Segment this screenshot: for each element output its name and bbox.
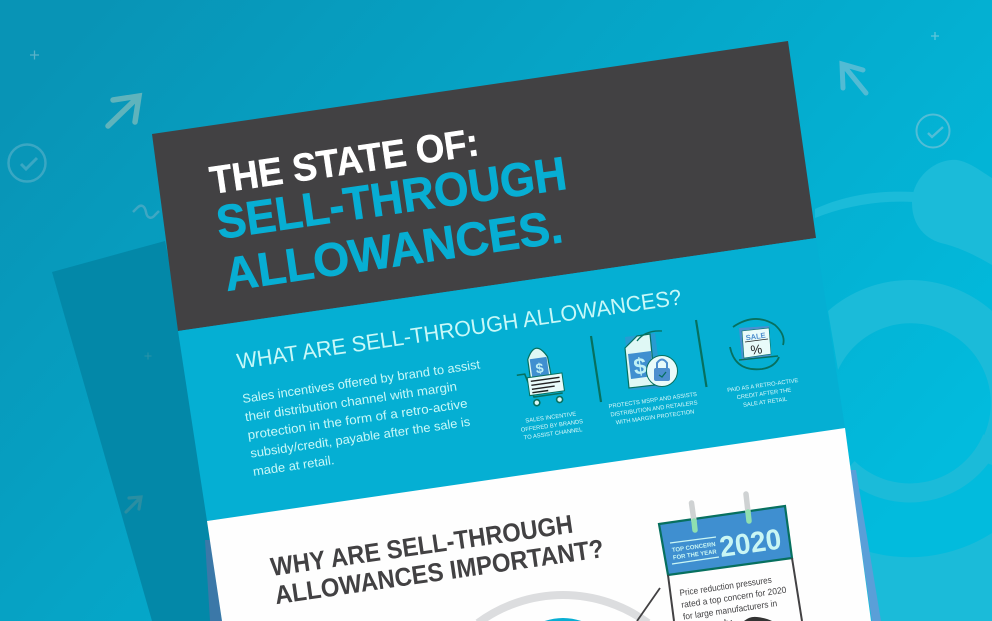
caption: sales incentive: SALES INCENTIVE bbox=[525, 411, 577, 425]
icon: arrow on back sheet bbox=[126, 497, 141, 512]
calendar: top concern 2020 bbox=[659, 494, 802, 621]
calendar blob bbox=[744, 617, 772, 621]
panel: white lower section bbox=[207, 428, 871, 621]
caption: paid as retro-active: CREDIT AFTER THE bbox=[736, 388, 792, 401]
calendar rings bbox=[692, 494, 748, 521]
icon: price tag with lock: $ bbox=[632, 352, 648, 380]
icon: sale sign with circular arrows bbox=[730, 319, 784, 369]
chart ring partial bbox=[478, 588, 660, 621]
definition text: Sales incentives offered by brand to assist bbox=[241, 357, 481, 406]
decorative ring shapes bbox=[815, 160, 992, 621]
caption: protects msrp: PROTECTS MSRP AND ASSISTS bbox=[608, 392, 698, 410]
page edge sliver right bbox=[850, 470, 881, 621]
title line 3: ALLOWANCES. bbox=[221, 199, 566, 301]
calendar text: Price reduction pressures bbox=[679, 575, 773, 598]
icon: plus on back sheet bbox=[144, 352, 152, 360]
calendar year: 2020 bbox=[718, 524, 783, 564]
calendar label: FOR THE YEAR bbox=[673, 549, 718, 561]
icon: plus top right bbox=[931, 32, 939, 40]
definition text: protection in the form of a retro-active bbox=[247, 396, 468, 442]
calendar label rules bbox=[670, 537, 719, 564]
heading: why are sell-through allowances important: ALLOWANCES IMPORTANT? bbox=[273, 533, 606, 610]
icon: price tag with lock bbox=[625, 331, 678, 390]
caption: paid as retro-active bbox=[727, 378, 801, 411]
icon: arrow top right bbox=[842, 64, 866, 93]
title line 1: THE STATE OF: bbox=[207, 121, 481, 203]
definition text bbox=[241, 357, 492, 479]
icon: arrow top left bbox=[108, 96, 139, 126]
heading: what are sell-through allowances: WHAT ARE SELL-THROUGH ALLOWANCES? bbox=[235, 284, 683, 374]
definition text: their distribution channel with margin bbox=[244, 379, 458, 424]
calendar text: rated a top concern for 2020 bbox=[681, 585, 787, 610]
icon: sale sign with circular arrows: % bbox=[750, 341, 764, 358]
icon: shopping cart with tag: $ bbox=[535, 360, 545, 376]
icon: check circle left bbox=[8, 144, 46, 182]
calendar label: TOP CONCERN bbox=[672, 542, 716, 554]
divider one bbox=[591, 336, 601, 402]
caption: paid as retro-active: SALE AT RETAIL bbox=[743, 397, 788, 409]
caption: protects msrp: WITH MARGIN PROTECTION bbox=[616, 409, 695, 426]
calendar edges bbox=[668, 558, 802, 621]
icon: check circle right bbox=[916, 114, 950, 148]
icon: plus top left bbox=[30, 50, 39, 60]
calendar text: for large manufacturers in bbox=[682, 598, 778, 621]
icon: squiggle bbox=[133, 206, 159, 218]
icon: shopping cart with tag bbox=[513, 345, 566, 408]
definition text: made at retail. bbox=[252, 453, 335, 479]
heading: why are sell-through allowances important: WHY ARE SELL-THROUGH bbox=[269, 509, 575, 582]
icon: sale sign with circular arrows: SALE bbox=[745, 331, 766, 342]
caption: sales incentive: OFFERED BY BRANDS bbox=[521, 419, 584, 434]
caption: sales incentive bbox=[519, 411, 585, 442]
title bbox=[207, 121, 570, 301]
panel: dark title band bbox=[152, 41, 816, 331]
back sheet bbox=[52, 241, 240, 621]
definition text: subsidy/credit, payable after the sale is bbox=[249, 415, 471, 461]
caption: protects msrp bbox=[608, 392, 700, 427]
page edge sliver left bbox=[205, 540, 222, 621]
caption: paid as retro-active: PAID AS A RETRO-ACTIVE bbox=[727, 378, 799, 394]
caption: sales incentive: TO ASSIST CHANNEL bbox=[523, 427, 584, 441]
calendar label bbox=[672, 542, 718, 561]
divider two bbox=[696, 320, 706, 387]
calendar header bbox=[659, 506, 792, 575]
title line 2: SELL-THROUGH bbox=[213, 146, 570, 249]
calendar text bbox=[679, 573, 790, 621]
caption: protects msrp: DISTRIBUTION AND RETAILERS bbox=[610, 400, 698, 419]
panel: blue definition band bbox=[178, 238, 845, 521]
